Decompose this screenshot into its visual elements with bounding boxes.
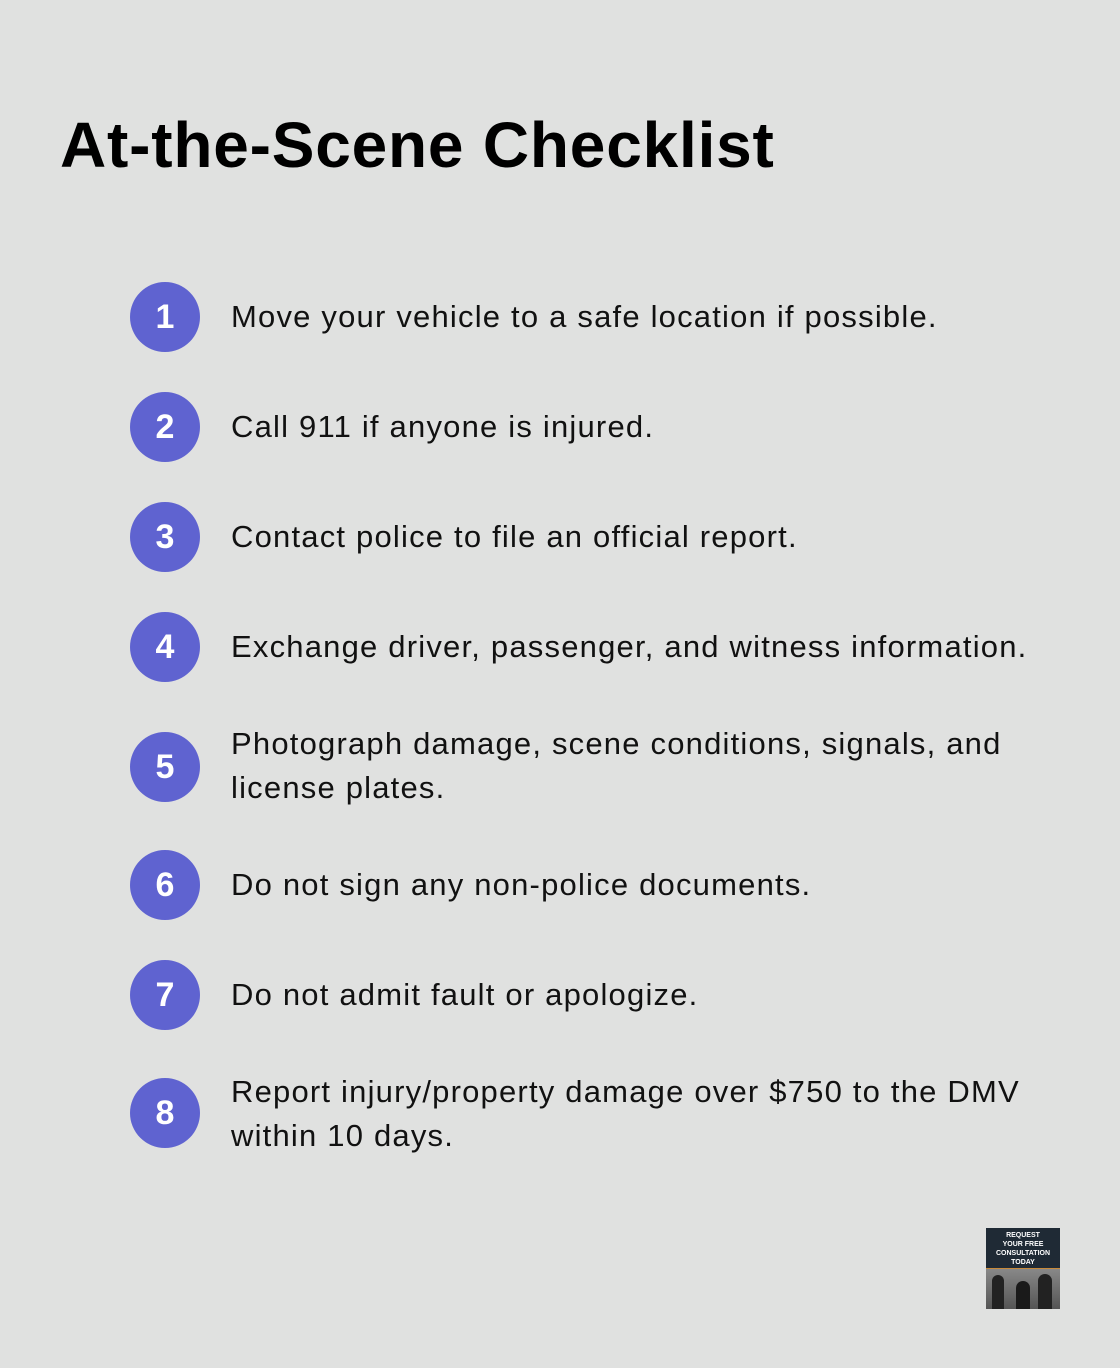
item 4: 4 [156,628,174,666]
item 5: 5 [156,748,174,786]
badge text: REQUEST [1006,1232,1040,1239]
item 4: Exchange driver, passenger, and witness information. [231,629,1028,664]
item 7: 7 [156,976,174,1014]
item 8: 8 [156,1094,174,1132]
badge text: TODAY [1011,1259,1035,1266]
item 4 [130,612,1028,682]
item 8: within 10 days. [231,1118,454,1153]
item 2 [130,392,654,462]
badge text [996,1232,1050,1266]
item 6 [130,850,811,920]
badge text: CONSULTATION [996,1250,1050,1257]
item 3 [130,502,798,572]
title: At-the-Scene Checklist [60,109,775,181]
item 6: 6 [156,866,174,904]
item 2: 2 [156,408,174,446]
badge photo [986,1268,1060,1309]
item 1: Move your vehicle to a safe location if possible. [231,299,938,334]
item 7 [130,960,698,1030]
item 3: Contact police to file an official report. [231,519,798,554]
item 2: Call 911 if anyone is injured. [231,409,654,444]
item 5: Photograph damage, scene conditions, signals, and [231,726,1002,761]
item 1: 1 [156,298,174,336]
item 8: Report injury/property damage over $750 to the DMV [231,1074,1020,1109]
item 3: 3 [156,518,174,556]
item 7: Do not admit fault or apologize. [231,977,698,1012]
logo badge [986,1228,1060,1308]
item 5 [130,726,1002,805]
badge text: YOUR FREE [1003,1241,1043,1248]
item 8 [130,1074,1020,1153]
item 6: Do not sign any non-police documents. [231,867,811,902]
item 1 [130,282,938,352]
item 5: license plates. [231,770,445,805]
